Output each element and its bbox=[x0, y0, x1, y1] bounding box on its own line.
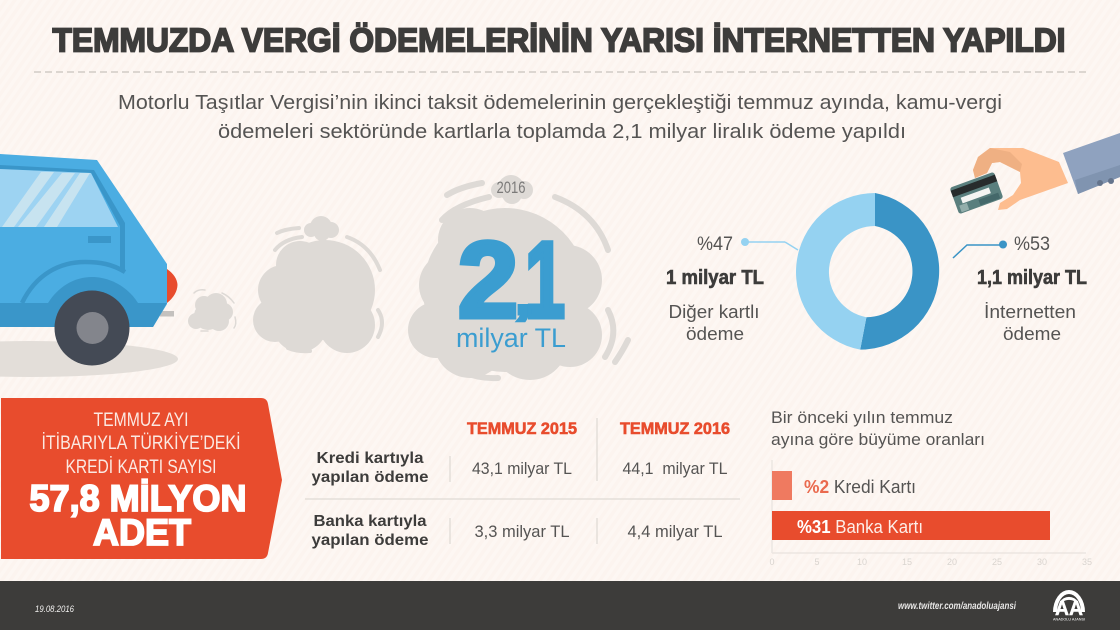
comparison table: 3,3 milyar TL bbox=[474, 522, 570, 541]
comparison table: Kredi kartıyla bbox=[316, 450, 424, 467]
icon: hand holding card bbox=[950, 133, 1120, 214]
footer bar: 19.08.2016 bbox=[35, 604, 75, 615]
comparison table: 43,1 milyar TL bbox=[472, 459, 572, 478]
intro text: ödemeleri sektöründe kartlarla toplamda 2,1 milyar liralık ödeme yapıldı bbox=[218, 121, 906, 143]
growth chart heading: ayına göre büyüme oranları bbox=[771, 431, 985, 449]
bar chart: growth rates bbox=[769, 460, 1092, 567]
headline number: 1 bbox=[525, 219, 565, 340]
intro text bbox=[118, 92, 1002, 143]
right donut label: %53 bbox=[1014, 234, 1050, 255]
bar chart: growth rates: 5 bbox=[814, 557, 820, 567]
growth chart heading: Bir önceki yılın temmuz bbox=[771, 409, 953, 427]
comparison table: TEMMUZ 2015 bbox=[467, 419, 577, 438]
donut chart bbox=[796, 193, 939, 350]
left donut label: Diğer kartlı bbox=[668, 302, 760, 322]
comparison table: Banka kartıyla bbox=[314, 513, 427, 530]
bar chart: growth rates: 25 bbox=[992, 557, 1002, 567]
comparison table: TEMMUZ 2016 bbox=[620, 419, 730, 438]
right donut label: ödeme bbox=[1003, 324, 1061, 344]
comparison table bbox=[305, 418, 740, 549]
logo: Anadolu Agency: AA bbox=[1055, 598, 1083, 620]
illustration: small smoke puff bbox=[188, 290, 236, 331]
left donut label: ödeme bbox=[686, 324, 744, 344]
illustration: car bbox=[0, 154, 178, 377]
illustration: big smoke cloud bbox=[408, 175, 628, 380]
bar chart: growth rates: %31 Banka Kartı bbox=[797, 517, 923, 537]
footer bar bbox=[0, 581, 1120, 630]
right donut label: İnternetten bbox=[984, 302, 1076, 322]
comparison table: 4,4 milyar TL bbox=[628, 522, 722, 541]
red callout: credit card count: ADET bbox=[93, 512, 191, 553]
headline number: 2 bbox=[458, 219, 518, 340]
red callout: credit card count: KREDİ KARTI SAYISI bbox=[66, 455, 216, 478]
headline number: , bbox=[517, 274, 529, 323]
growth chart heading bbox=[771, 409, 985, 449]
year label: 2016 bbox=[496, 178, 526, 197]
left donut label bbox=[666, 234, 798, 344]
footer bar: www.twitter.com/anadoluajansi bbox=[898, 600, 1017, 612]
comparison table: yapılan ödeme bbox=[312, 469, 429, 486]
comparison table: 44,1 milyar TL bbox=[622, 459, 728, 478]
bar chart: growth rates: 0 bbox=[769, 557, 775, 567]
title: TEMMUZDA VERGİ ÖDEMELERİNİN YARISI İNTERNETTEN YAPILDI bbox=[52, 22, 1066, 60]
logo: Anadolu Agency: ANADOLU AJANSI bbox=[1053, 618, 1085, 622]
bar chart: growth rates: 20 bbox=[947, 557, 957, 567]
headline number bbox=[456, 219, 566, 353]
red callout: credit card count: 57,8 MİLYON bbox=[30, 478, 246, 519]
comparison table: yapılan ödeme bbox=[312, 532, 429, 549]
bar chart: growth rates: 30 bbox=[1037, 557, 1047, 567]
intro text: Motorlu Taşıtlar Vergisi’nin ikinci taksit ödemelerinin gerçekleştiği temmuz ayında, kamu-vergi bbox=[118, 92, 1002, 114]
red callout: credit card count bbox=[1, 398, 282, 559]
bar chart: growth rates: 35 bbox=[1082, 557, 1092, 567]
illustration: medium smoke cloud bbox=[253, 216, 382, 353]
bar chart: growth rates: %2 Kredi Kartı bbox=[804, 477, 916, 497]
bar chart: growth rates: 15 bbox=[902, 557, 912, 567]
bar chart: growth rates: 10 bbox=[857, 557, 867, 567]
right donut label: 1,1 milyar TL bbox=[977, 267, 1087, 289]
right donut label bbox=[953, 234, 1087, 344]
left donut label: 1 milyar TL bbox=[666, 267, 764, 289]
red callout: credit card count: İTİBARIYLA TÜRKİYE’DEKİ bbox=[42, 431, 240, 454]
headline number: milyar TL bbox=[456, 323, 566, 353]
logo: Anadolu Agency bbox=[1053, 590, 1085, 622]
left donut label: %47 bbox=[697, 234, 733, 255]
red callout: credit card count: TEMMUZ AYI bbox=[94, 409, 188, 431]
